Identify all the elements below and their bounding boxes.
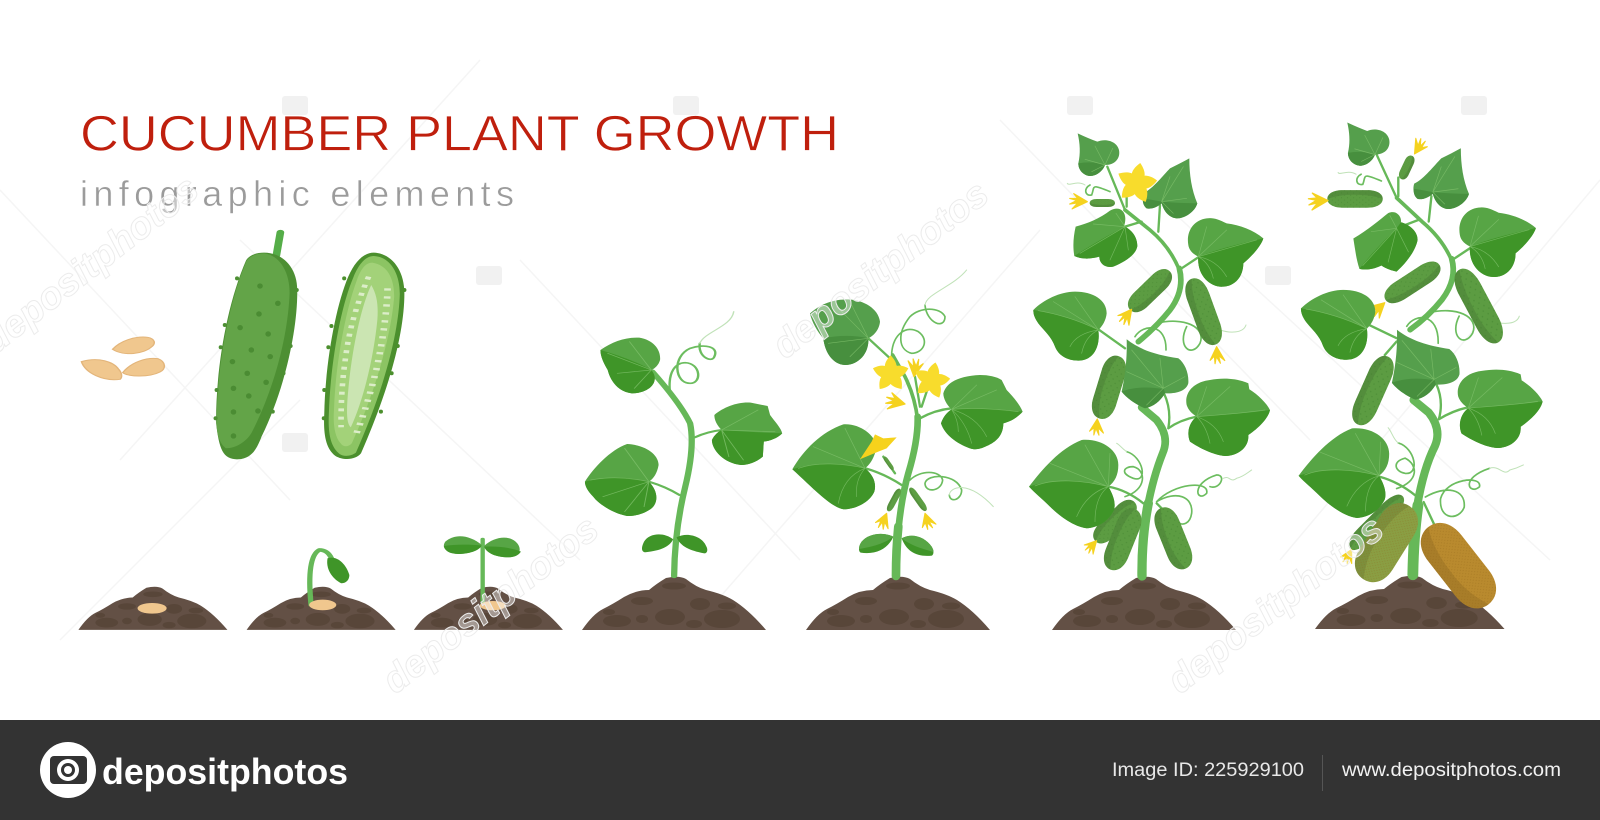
depositphotos watermark text: depositphotos [765, 173, 997, 367]
soil mound: stage 3 [414, 587, 563, 630]
yellowing fruit [1347, 496, 1426, 590]
leaf: upper left [1353, 212, 1418, 272]
footer website: www.depositphotos.com [1341, 760, 1561, 781]
footer logo [40, 742, 348, 798]
female flower tails: stage 5 [874, 358, 937, 531]
leaf: lower left [1299, 428, 1389, 518]
leaf: top left [1078, 133, 1119, 176]
small fruits: stage 5 [882, 456, 929, 513]
faint watermark lines and camera marks [0, 60, 1600, 640]
leaf: upper left [1073, 209, 1137, 267]
soil mound: stage 2 [247, 587, 396, 630]
plant: stage 5 with flowers [792, 270, 1023, 576]
yellow flower: stage 6 [1112, 159, 1162, 207]
depositphotos watermark text: depositphotos [375, 508, 607, 702]
fruits: stage 6 [1088, 199, 1226, 574]
footer image id: Image ID: 225929100 [1112, 760, 1304, 781]
stem: stage 6 [1098, 167, 1199, 576]
tendrils: stage 5 [892, 270, 993, 507]
depositphotos watermark text: depositphotos [1160, 508, 1392, 702]
leaf: top right [1413, 148, 1469, 209]
whole cucumber [214, 232, 299, 459]
leaf: middle left [1301, 290, 1375, 360]
seeds group [81, 337, 164, 380]
leaf: upper right [1459, 207, 1536, 277]
seed in soil: stage 1 [138, 603, 167, 614]
tendrils: stage 7 [1338, 172, 1523, 516]
female flower tails: stage 7 [1308, 136, 1429, 565]
footer logo: depositphotos [102, 751, 348, 792]
plant: stage 4 [585, 312, 782, 576]
soil mound: stage 7 [1315, 576, 1505, 629]
cucumber cross-section [322, 253, 406, 459]
tendrils: stage 6 [1067, 183, 1252, 524]
leaf: upper right [1188, 218, 1263, 287]
leaf: top [810, 299, 880, 365]
plant: stage 6 with young fruits [1029, 133, 1270, 576]
soil mound: stage 5 [806, 577, 990, 630]
seedling: stage 3 [444, 536, 521, 610]
leaf: left [792, 424, 877, 509]
stem: stage 5 [865, 338, 952, 576]
depositphotos watermark text [0, 168, 1392, 702]
fruits: stage 7 [1327, 154, 1509, 555]
female flower tails: stage 6 [1070, 194, 1225, 556]
ripe brown fruit [1412, 514, 1505, 617]
leaf: right [941, 375, 1023, 449]
leaf: center [1392, 330, 1460, 400]
leaf: middle left [1033, 292, 1107, 361]
title: CUCUMBER PLANT GROWTH [80, 106, 839, 162]
leaf: lower left [1029, 440, 1118, 528]
soil mound: stage 1 [78, 587, 227, 630]
leaf: top left [1347, 123, 1389, 166]
leaf: top right [1143, 158, 1197, 218]
yellow flowers: stage 5 [860, 355, 955, 459]
soil mound: stage 6 [1052, 577, 1236, 630]
footer bar [0, 720, 1600, 820]
stem: stage 7 [1369, 154, 1472, 575]
cotyledon leaves: stage 5 [859, 534, 933, 556]
leaf: center [1122, 339, 1188, 408]
soil mound: stage 4 [582, 577, 766, 630]
sprout: stage 2 [309, 550, 349, 610]
subtitle: infographic elements [80, 173, 514, 214]
leaf: lower right [1186, 379, 1270, 456]
plant: stage 7 with ripe fruits [1299, 123, 1543, 617]
leaf: lower right [1458, 370, 1543, 448]
